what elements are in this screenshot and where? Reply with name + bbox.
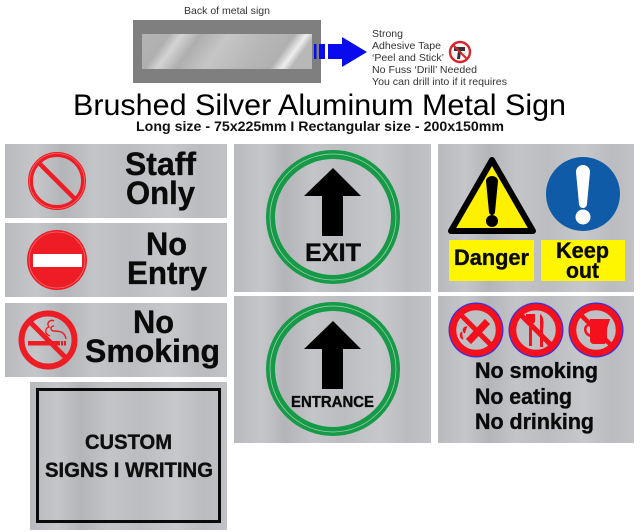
label: danger	[449, 240, 534, 281]
text block: adhesive tape notes: ‘Peel and Stick’	[372, 52, 444, 64]
panel: danger keep out	[438, 144, 634, 292]
icon: warning triangle	[451, 160, 533, 231]
sign text: Entry	[127, 255, 207, 291]
icon: green ring	[270, 306, 396, 432]
label: keep out	[541, 238, 625, 283]
text block: adhesive tape notes: Adhesive Tape	[372, 40, 441, 52]
icon: no drinking	[568, 302, 624, 358]
sign text: Smoking	[85, 333, 220, 369]
icon: no drill	[450, 42, 470, 62]
panel: no entry	[5, 223, 227, 297]
panel: no smoking	[5, 303, 227, 377]
text block: adhesive tape notes	[372, 28, 507, 88]
icon: no entry	[27, 230, 87, 290]
sign text: No	[146, 226, 187, 262]
sign text	[125, 146, 196, 211]
sign text: No	[133, 304, 174, 340]
icon: no eating	[508, 302, 564, 358]
sign text: No eating	[475, 384, 572, 409]
sign text	[45, 431, 213, 482]
sign text: No smoking	[475, 358, 598, 383]
label: keep out: out	[566, 258, 600, 283]
sign text: Only	[126, 175, 195, 211]
sign text	[127, 226, 207, 291]
caption: back of metal sign: Back of metal sign	[184, 5, 270, 17]
icon: no smoking	[22, 314, 74, 366]
sign text: EXIT	[305, 239, 361, 267]
panel: staff only	[5, 144, 227, 218]
back of sign illustration	[133, 20, 321, 83]
text block: adhesive tape notes: You can drill into if it requires	[372, 76, 507, 88]
sign text	[85, 304, 220, 369]
panel: exit	[234, 144, 431, 292]
arrow: up	[304, 321, 361, 389]
sign text	[475, 358, 598, 434]
sign text: SIGNS I WRITING	[45, 459, 213, 482]
panel: no smoking eating drinking	[438, 296, 634, 443]
label: keep out: Keep	[556, 238, 609, 263]
sign text: Staff	[125, 146, 196, 182]
arrow: up	[304, 168, 361, 236]
panel: custom signs	[30, 382, 227, 530]
text block: adhesive tape notes: No Fuss ‘Drill’ Needed	[372, 64, 477, 76]
sign text: CUSTOM	[85, 431, 172, 454]
icon: mandatory blue circle	[546, 157, 620, 231]
sign text: ENTRANCE	[291, 394, 374, 411]
icon: no smoking	[448, 302, 504, 358]
panel: entrance	[234, 296, 431, 443]
arrow: blue pointing right	[314, 37, 367, 67]
subtitle: sizes: Long size - 75x225mm I Rectangular size - 200x150mm	[136, 119, 504, 134]
text block: adhesive tape notes: Strong	[372, 28, 403, 40]
label: danger: Danger	[454, 245, 529, 270]
sign text: No drinking	[475, 409, 594, 434]
icon: green ring	[270, 154, 396, 280]
title: Brushed Silver Aluminum Metal Sign	[73, 89, 566, 122]
icon: prohibition sign	[30, 154, 84, 208]
